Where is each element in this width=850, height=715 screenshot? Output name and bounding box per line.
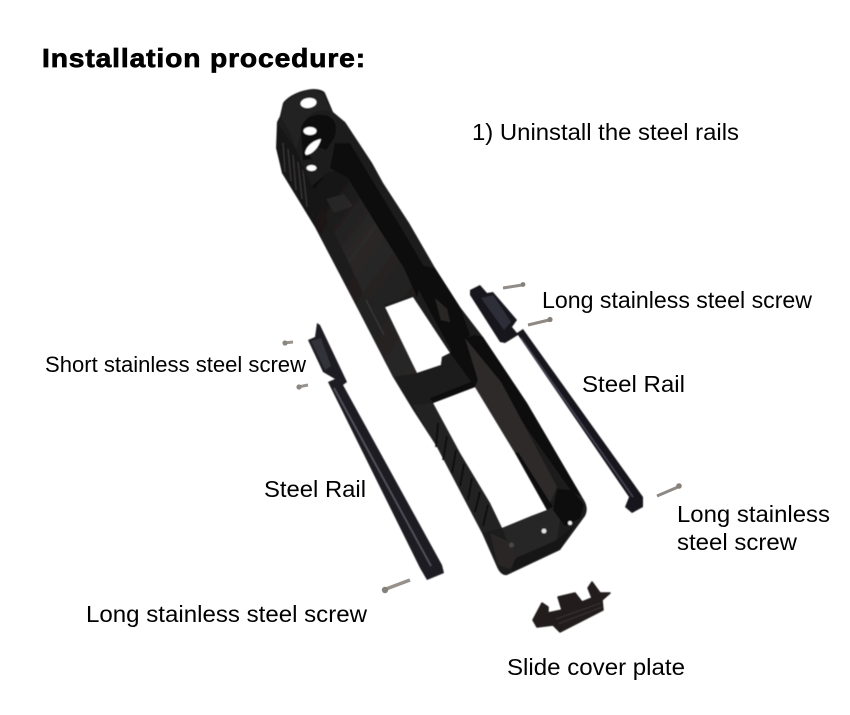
label: long screw, right rail end: Long stainless (677, 501, 830, 527)
label: long screw, right rail end: steel screw (677, 529, 797, 555)
label: long screw, right rail end (677, 501, 830, 555)
label: slide cover plate: Slide cover plate (507, 654, 685, 680)
long screw, right rail end (657, 483, 682, 496)
rear end block (502, 507, 560, 558)
slide cover plate (533, 582, 610, 632)
long screw, upper right (503, 282, 525, 288)
left wall serrated surface (413, 403, 502, 533)
holes (300, 97, 317, 109)
muzzle hood (281, 90, 331, 150)
label: long screw, left rail end: Long stainless steel screw (86, 601, 367, 627)
right top edge (345, 122, 435, 268)
right steel rail (470, 285, 643, 513)
long screw, lower of right block (528, 317, 553, 325)
short screw, upper (282, 340, 293, 346)
interior floor (312, 170, 418, 309)
label: steel rail, left: Steel Rail (264, 476, 366, 502)
left wall top surface (302, 165, 417, 377)
title: Installation procedure: (42, 43, 366, 73)
serrated side, front (277, 123, 324, 227)
breech scallop (301, 115, 336, 160)
short screw, lower (296, 384, 308, 390)
roll mark (366, 300, 384, 335)
label: steel rail, right: Steel Rail (582, 371, 685, 397)
slide body (276, 89, 587, 575)
rear section detail (405, 262, 470, 352)
right wall (450, 338, 501, 387)
long screw, left rail end (382, 580, 410, 593)
interior right wall (330, 143, 425, 297)
label: short screw: Short stainless steel screw (45, 352, 306, 377)
step instruction: 1) Uninstall the steel rails (472, 119, 739, 145)
left steel rail (308, 323, 444, 580)
outer slide silhouette (276, 89, 587, 575)
label: long screw, upper right: Long stainless steel screw (542, 287, 812, 313)
bridge between windows (417, 353, 475, 403)
